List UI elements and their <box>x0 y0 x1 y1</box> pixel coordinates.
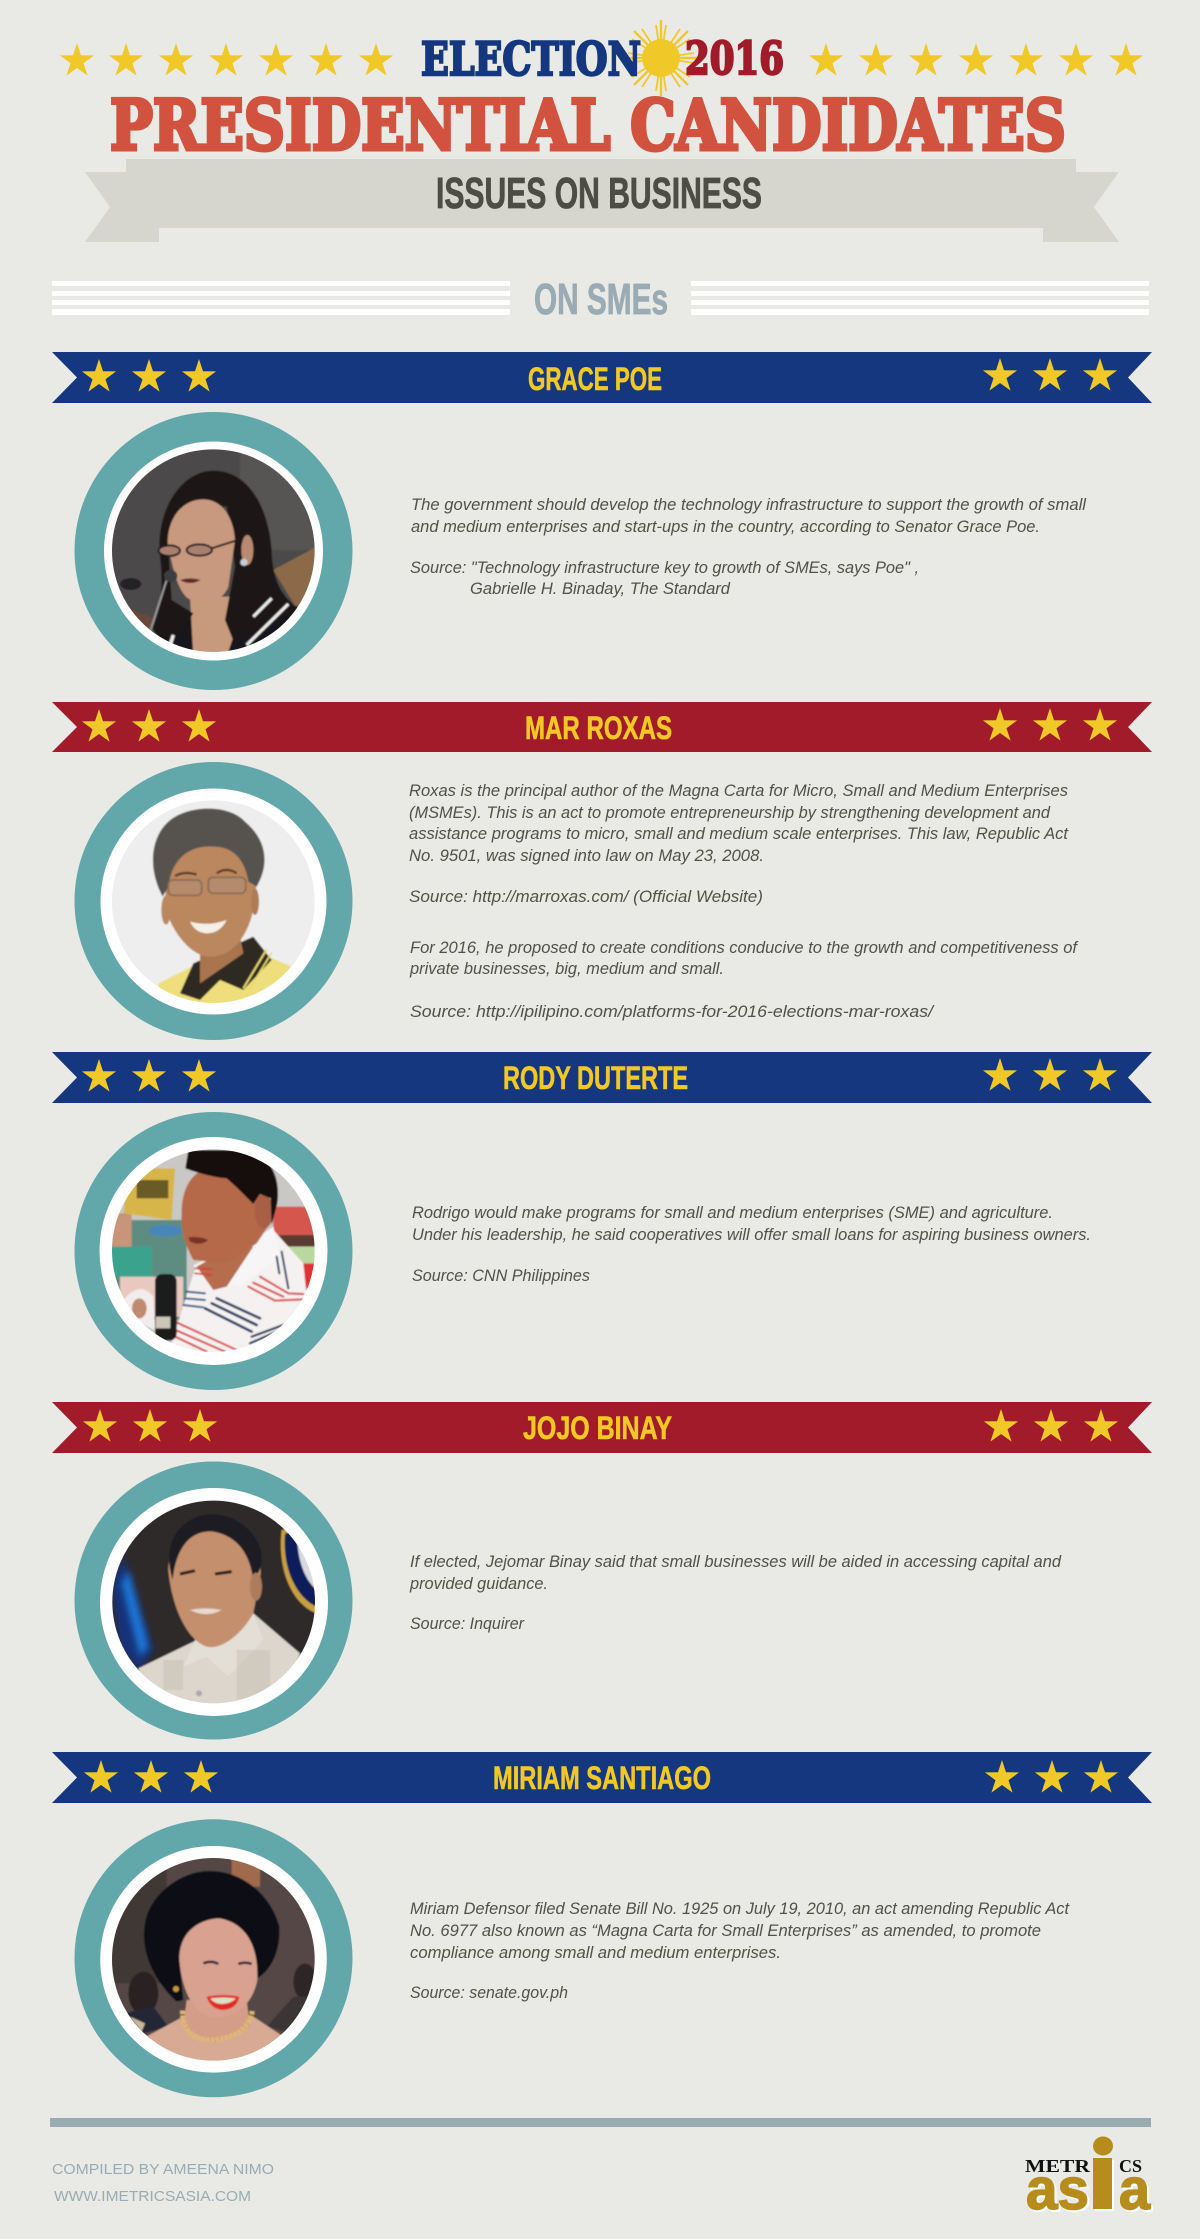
panel: Mar Roxas <box>52 702 1152 1040</box>
left row of stars <box>60 43 393 76</box>
text: Mar Roxas position: assistance programs to micro, small and medium scale enterprises. This law, Republic Act <box>409 825 1069 843</box>
text: Mar Roxas position: Roxas is the principal author of the Magna Carta for Micro, Small and Medium Enterprises <box>409 782 1068 800</box>
logo: Metrics Asia: as <box>1028 2159 1091 2224</box>
text: Rody Duterte position <box>412 1204 1091 1285</box>
text: Mar Roxas position: No. 9501, was signed into law on May 23, 2008. <box>409 847 764 865</box>
text: Miriam Santiago position: No. 6977 also known as “Magna Carta for Small Enterprises” as amended, to promote <box>410 1922 1041 1940</box>
portrait: Rody Duterte <box>74 1112 352 1390</box>
icon: sun <box>623 20 699 96</box>
text: Miriam Santiago position: compliance among small and medium enterprises. <box>410 1944 781 1962</box>
text: Miriam Santiago position: Miriam Defensor filed Senate Bill No. 1925 on July 19, 2010, an act amending Republic Act <box>410 1900 1070 1918</box>
panel: Miriam Santiago <box>52 1752 1152 2097</box>
banner: Miriam Santiago <box>52 1752 1152 1803</box>
header <box>60 20 1143 242</box>
banner: Mar Roxas <box>52 702 1152 752</box>
section heading: On SMEs: ON SMEs <box>534 275 668 324</box>
footer <box>50 2118 1153 2224</box>
heading: Election: ELECTION <box>421 32 641 86</box>
right row of stars <box>809 43 1143 76</box>
portrait: Grace Poe <box>74 412 352 690</box>
text: Grace Poe position: Gabrielle H. Binaday, The Standard <box>470 580 731 598</box>
logo: Metrics Asia: a <box>1119 2157 1151 2222</box>
credits <box>52 2161 274 2205</box>
banner: Rody Duterte <box>52 1052 1152 1103</box>
text: Mar Roxas position: private businesses, big, medium and small. <box>409 960 724 978</box>
text: Rody Duterte position: Source: CNN Philippines <box>412 1267 590 1285</box>
credits: WWW.IMETRICSASIA.COM <box>54 2188 251 2205</box>
logo: Metrics Asia <box>1025 2136 1153 2224</box>
banner: Grace Poe <box>52 352 1152 403</box>
ribbon <box>85 159 1119 242</box>
text: Rody Duterte position: Rodrigo would make programs for small and medium enterprises (SME) and agriculture. <box>412 1204 1053 1222</box>
text: Mar Roxas position: For 2016, he proposed to create conditions conducive to the growth and competitiveness of <box>410 939 1079 957</box>
text: Grace Poe position: Source: "Technology infrastructure key to growth of SMEs, says Poe" , <box>410 559 919 577</box>
logo: Metrics Asia: as <box>1026 2157 1089 2222</box>
text: Jojo Binay position: Source: Inquirer <box>410 1615 525 1633</box>
logo: Metrics Asia: a <box>1121 2159 1153 2224</box>
banner: Miriam Santiago: MIRIAM SANTIAGO <box>493 1760 711 1796</box>
portrait: Jojo Binay <box>74 1462 352 1740</box>
logo: Metrics Asia: METR <box>1025 2156 1091 2176</box>
text: Mar Roxas position: Source: http://ipilipino.com/platforms-for-2016-elections-mar-roxas/ <box>410 1003 935 1021</box>
text: Grace Poe position: and medium enterprises and start-ups in the country, according to Senator Grace Poe. <box>411 518 1040 536</box>
panel: Jojo Binay <box>52 1402 1152 1740</box>
banner: Grace Poe: GRACE POE <box>528 361 662 397</box>
heading: 2016: 2016 <box>685 32 784 85</box>
text: Rody Duterte position: Under his leadership, he said cooperatives will offer small loans for aspiring business owners. <box>412 1226 1091 1244</box>
text: Miriam Santiago position: Source: senate.gov.ph <box>410 1984 568 2002</box>
subtitle: ISSUES ON BUSINESS <box>436 169 762 218</box>
panel: Rody Duterte <box>52 1052 1152 1390</box>
text: Jojo Binay position <box>409 1553 1062 1633</box>
portrait: Mar Roxas <box>74 762 352 1040</box>
section heading: On SMEs <box>52 275 1149 324</box>
credits: COMPILED BY AMEENA NIMO <box>52 2161 274 2178</box>
banner: Jojo Binay: JOJO BINAY <box>523 1410 672 1446</box>
banner: Jojo Binay <box>52 1402 1152 1453</box>
text: Mar Roxas position <box>409 782 1079 1021</box>
logo: Metrics Asia: CS <box>1119 2156 1142 2176</box>
text: Mar Roxas position: Source: http://marroxas.com/ (Official Website) <box>409 888 763 906</box>
panel: Grace Poe <box>52 352 1152 690</box>
text: Grace Poe position: The government should develop the technology infrastructure to support the growth of small <box>411 496 1087 514</box>
text: Miriam Santiago position <box>410 1900 1070 2002</box>
text: Grace Poe position <box>410 496 1087 598</box>
banner: Rody Duterte: RODY DUTERTE <box>503 1060 688 1096</box>
portrait: Miriam Santiago <box>74 1819 352 2097</box>
text: Jojo Binay position: provided guidance. <box>409 1575 548 1593</box>
banner: Mar Roxas: MAR ROXAS <box>525 710 672 746</box>
text: Mar Roxas position: (MSMEs). This is an act to promote entrepreneurship by strengthening development and <box>409 804 1051 822</box>
text: Jojo Binay position: If elected, Jejomar Binay said that small businesses will be aided in accessing capital and <box>410 1553 1062 1571</box>
